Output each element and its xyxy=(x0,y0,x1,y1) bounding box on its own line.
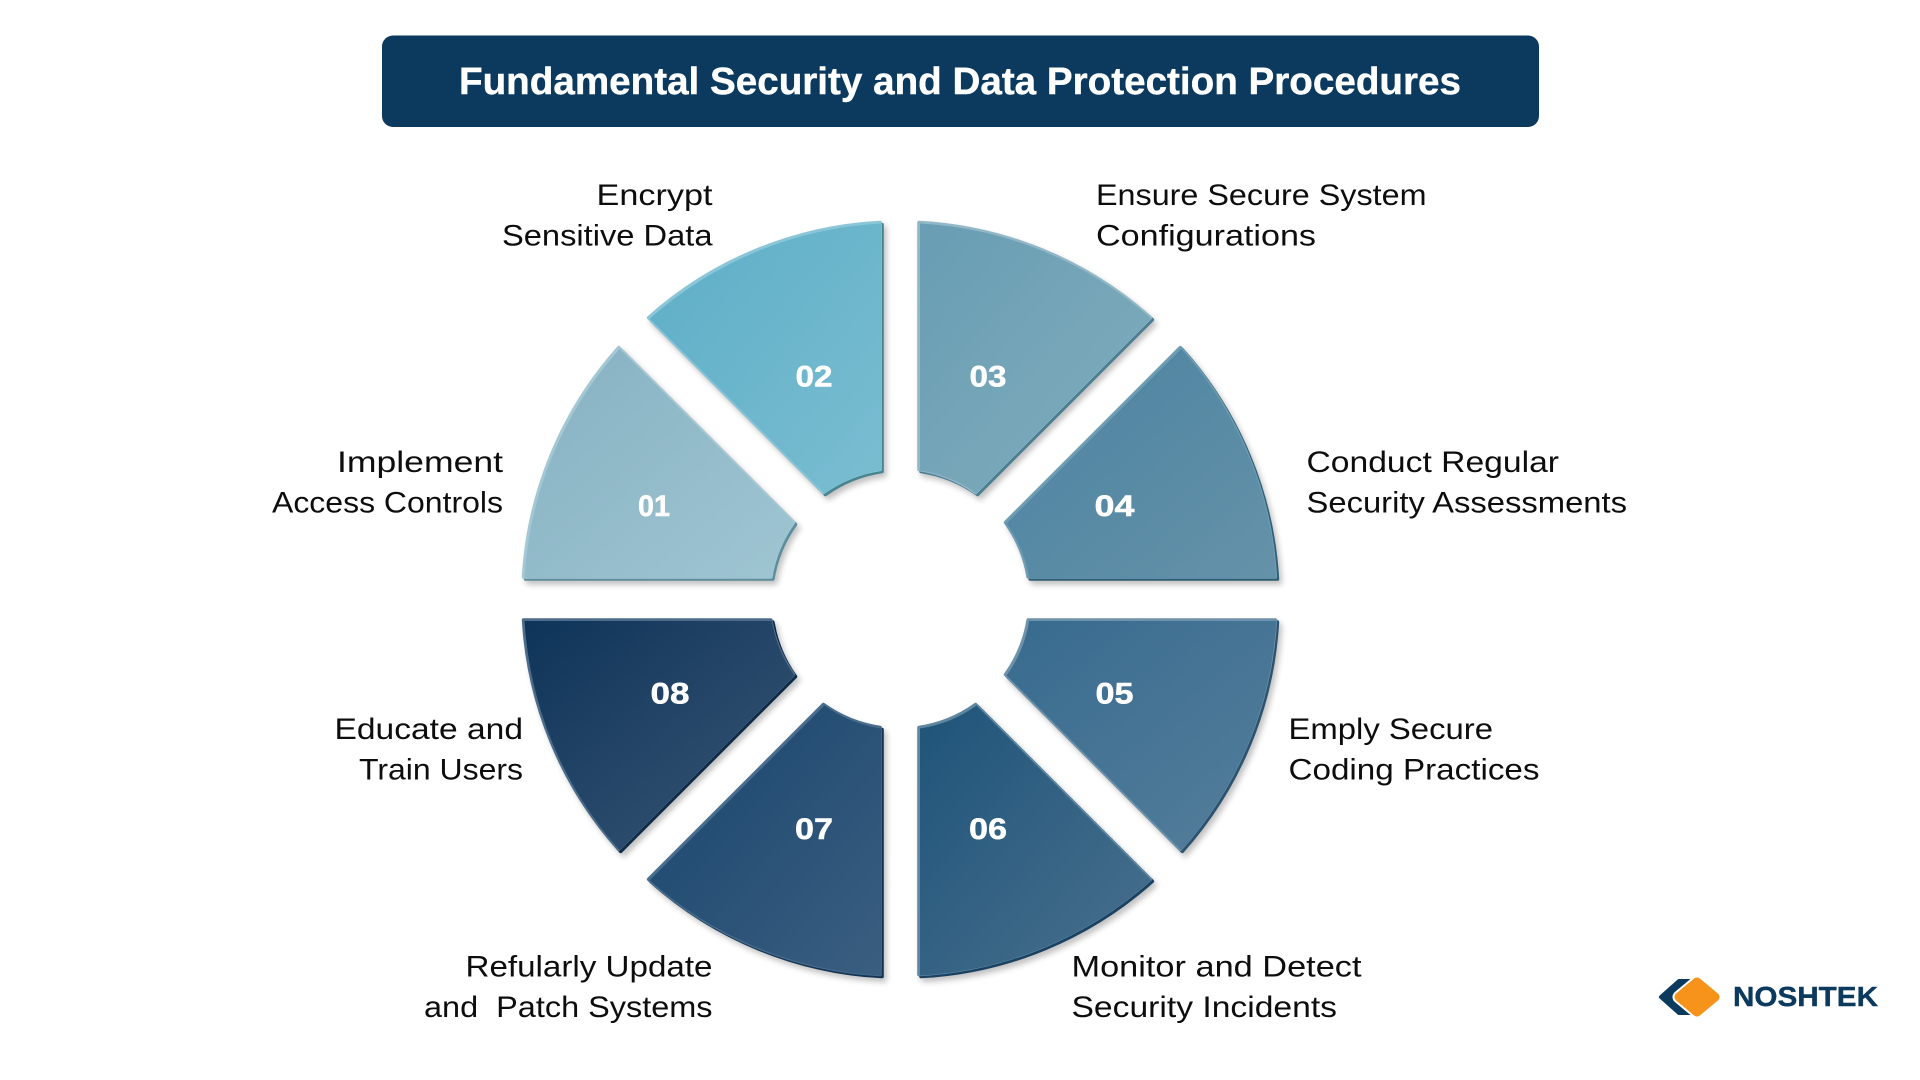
segment 05 xyxy=(1006,620,1277,851)
label: emply secure coding practices: Emply Secure xyxy=(1288,713,1493,746)
label: conduct regular security assessments: Conduct Regular xyxy=(1306,446,1559,479)
title banner xyxy=(382,36,1539,127)
number 01: 01 xyxy=(638,490,670,523)
wheel diagram xyxy=(524,222,1277,976)
segment 06 xyxy=(919,705,1152,976)
icon: navy chevron xyxy=(1661,981,1695,1013)
label: ensure secure system configurations xyxy=(1096,179,1426,252)
label: refularly update and patch systems xyxy=(424,950,712,1024)
number 02: 02 xyxy=(796,360,832,394)
segment 04 xyxy=(1006,348,1277,579)
label: implement access controls: Implement xyxy=(337,446,504,479)
label: monitor and detect security incidents xyxy=(1072,950,1362,1024)
number 06: 06 xyxy=(969,813,1007,846)
label: educate and train users: Educate and xyxy=(334,713,523,746)
segment 01 xyxy=(524,348,795,579)
label: encrypt sensitive data: Sensitive Data xyxy=(502,220,713,252)
segment 07 xyxy=(649,705,882,976)
label: conduct regular security assessments: Security Assessments xyxy=(1306,486,1627,520)
number 04: 04 xyxy=(1094,490,1135,523)
number 08: 08 xyxy=(650,678,690,710)
label: encrypt sensitive data: Encrypt xyxy=(596,179,713,212)
number 07: 07 xyxy=(795,813,833,846)
label: monitor and detect security incidents: Security Incidents xyxy=(1072,991,1337,1024)
label: conduct regular security assessments xyxy=(1306,446,1627,520)
label: refularly update and patch systems: Refularly Update xyxy=(466,950,712,984)
segment 03 xyxy=(919,222,1152,494)
number 05: 05 xyxy=(1096,678,1134,710)
label: encrypt sensitive data xyxy=(502,179,713,252)
label: educate and train users xyxy=(334,713,523,786)
label: ensure secure system configurations: Ensure Secure System xyxy=(1096,179,1426,212)
title text: Fundamental Security and Data Protection Procedures xyxy=(459,61,1461,103)
logo: noshtek xyxy=(1661,981,1878,1013)
logo wordmark: NOSHTEK xyxy=(1733,981,1878,1012)
label: educate and train users: Train Users xyxy=(359,754,523,786)
label: ensure secure system configurations: Configurations xyxy=(1096,220,1316,252)
segment 08 xyxy=(524,620,795,851)
label: refularly update and patch systems: and Patch Systems xyxy=(424,991,712,1024)
label: implement access controls xyxy=(272,446,504,520)
label: monitor and detect security incidents: Monitor and Detect xyxy=(1072,950,1362,984)
number 03: 03 xyxy=(970,360,1006,394)
label: implement access controls: Access Controls xyxy=(272,486,503,520)
segment 02 xyxy=(649,222,882,494)
icon: orange diamond xyxy=(1679,982,1715,1012)
label: emply secure coding practices: Coding Practices xyxy=(1288,754,1540,786)
label: emply secure coding practices xyxy=(1288,713,1540,786)
